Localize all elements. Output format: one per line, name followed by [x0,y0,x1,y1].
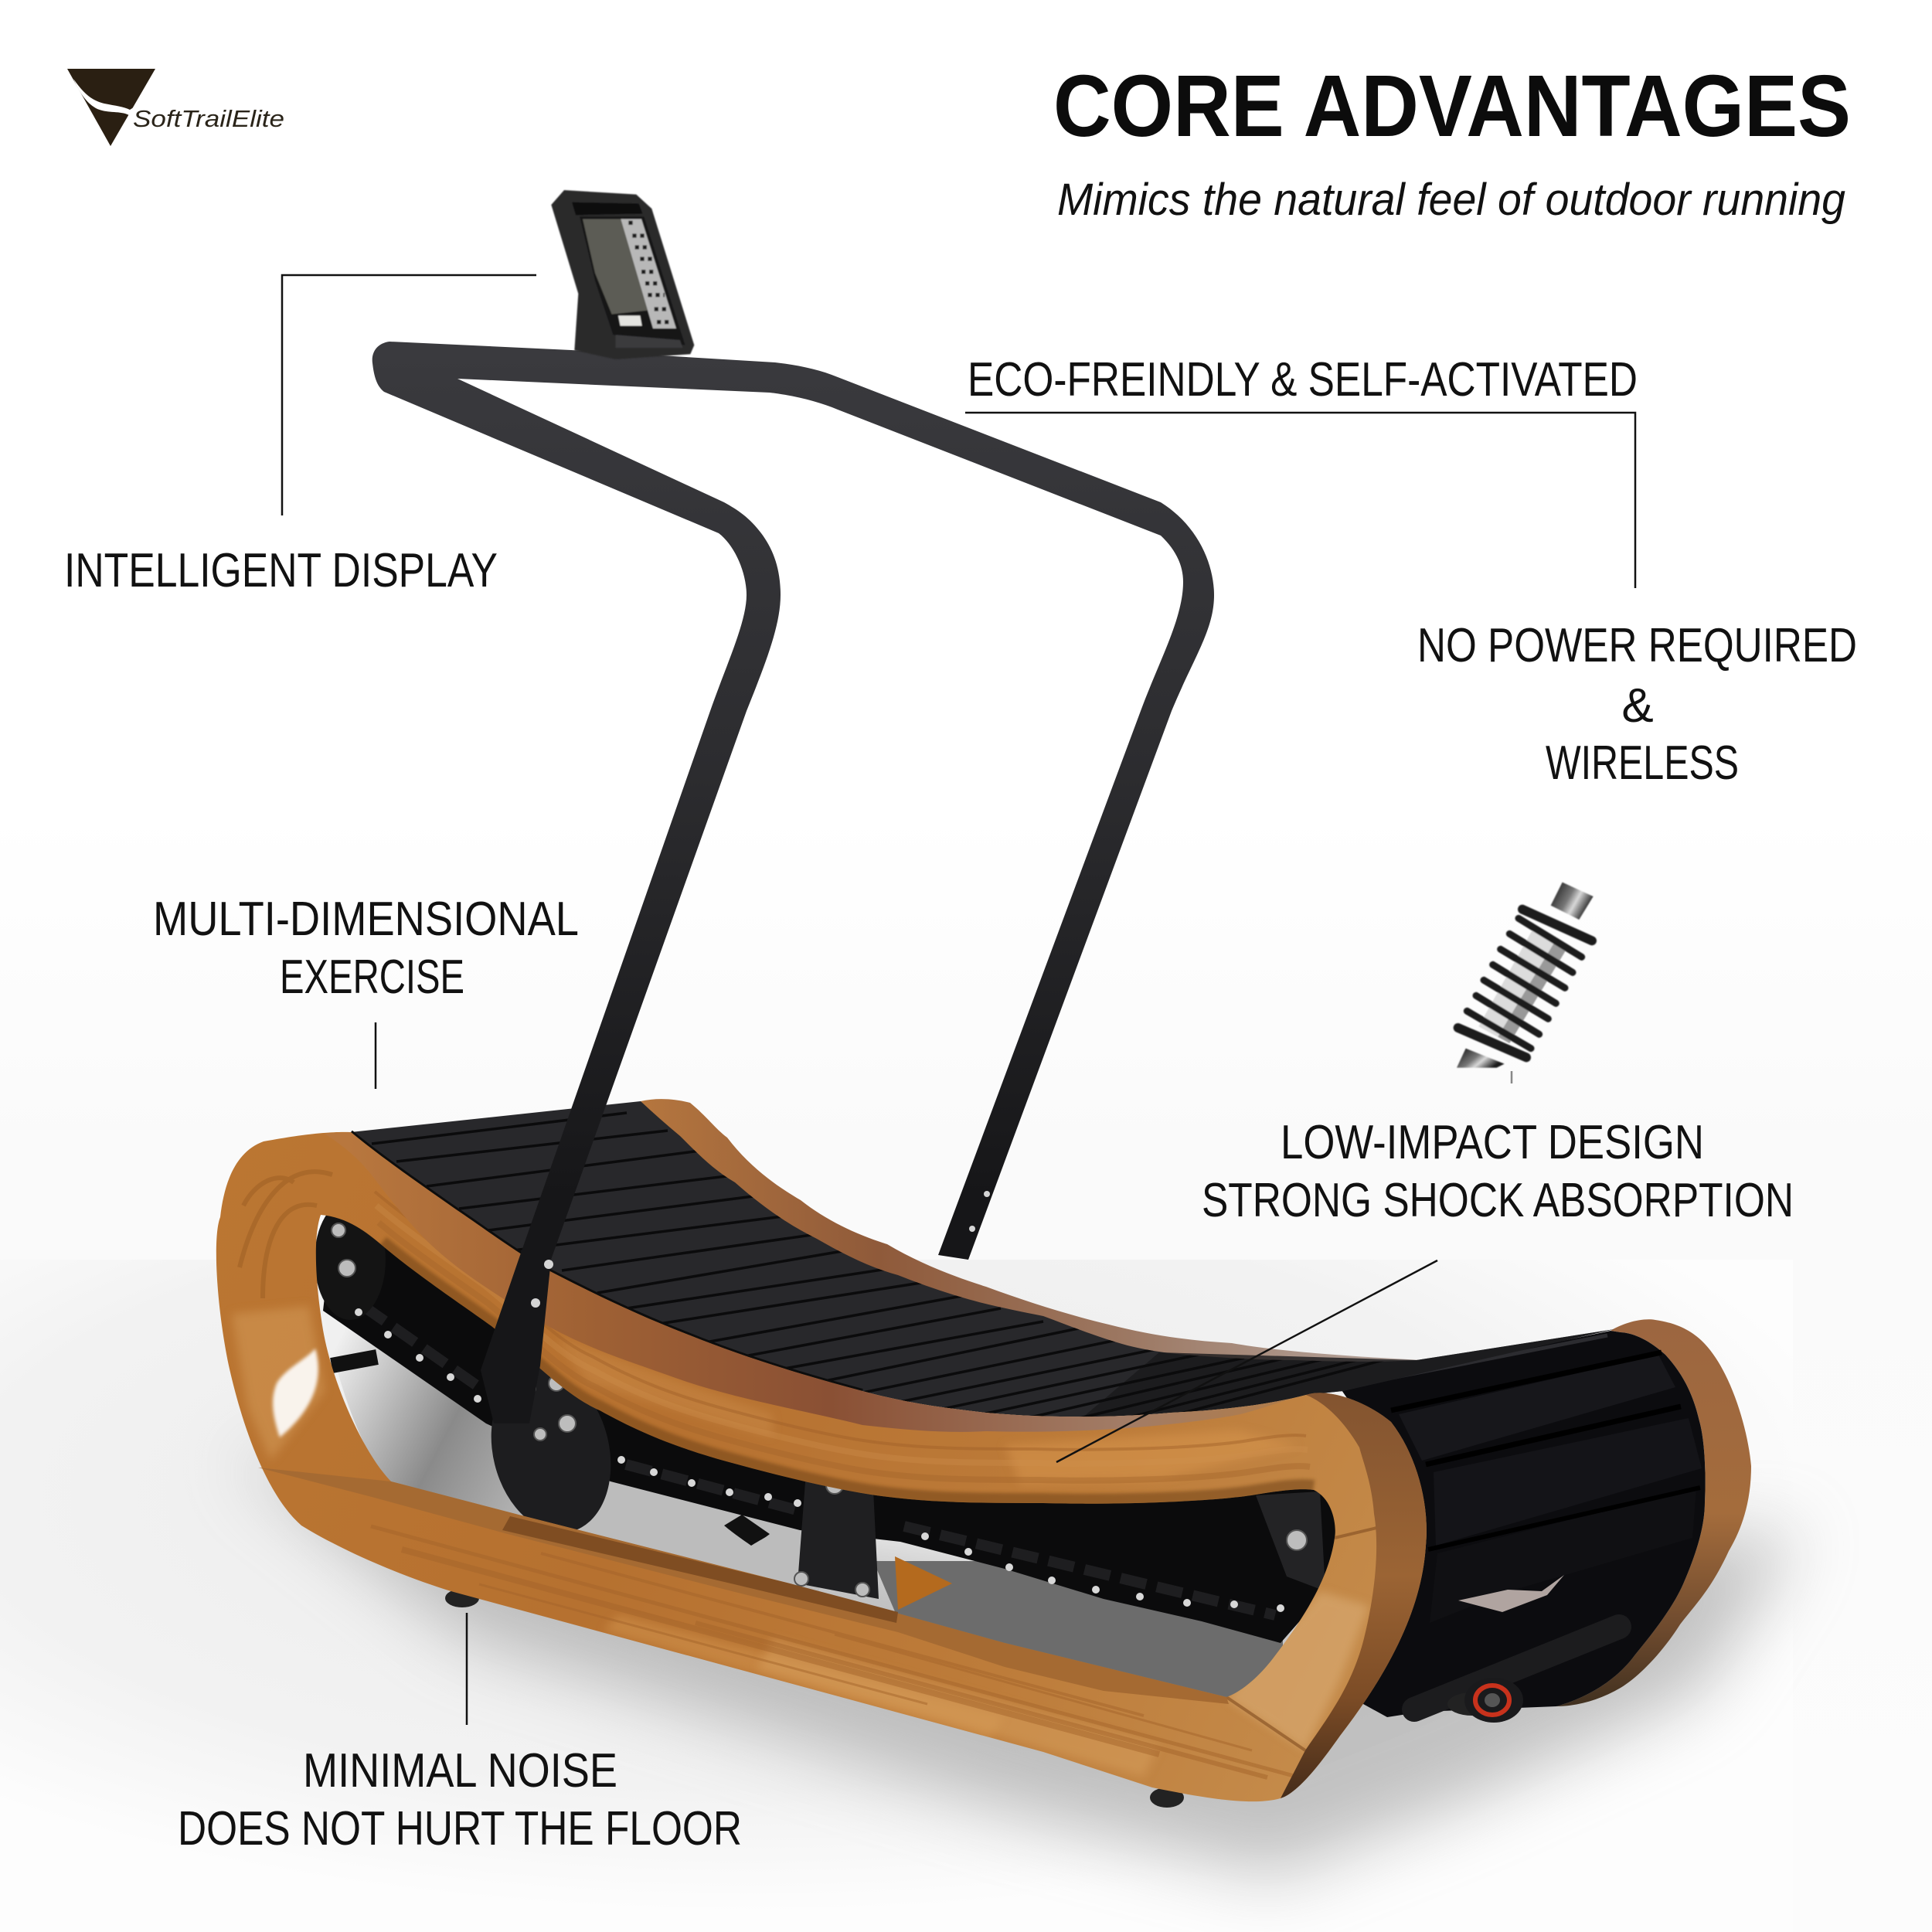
logo wordmark: SoftTrailElite [133,105,284,132]
chain studs [355,1308,1284,1612]
drive disc [474,1355,628,1546]
centre bracket [798,1472,879,1599]
rail under-shadow [383,1242,1314,1500]
running belt [351,1101,1614,1417]
label: intelligent display: INTELLIGENT DISPLAY [64,544,498,597]
label: multi-dimensional exercise: MULTI-DIMENSIONAL [153,893,579,946]
back wood frame [1556,1319,1751,1706]
foot right [1150,1787,1184,1808]
title: CORE ADVANTAGES [1053,57,1851,155]
treadmill [216,342,1751,1808]
logo: SoftTrailElite [67,69,284,146]
label: low-impact design: LOW-IMPACT DESIGN [1281,1116,1704,1169]
label: eco-friendly: ECO-FREINDLY & SELF-ACTIVATED [968,353,1638,406]
front wood frame [216,1132,1427,1801]
left sprocket plate [315,1199,386,1320]
mechanism [315,1199,1345,1643]
belt near edge [351,1132,862,1391]
icon: shock absorber spring [1457,883,1594,1068]
floor shadow [232,1453,1801,1878]
caster wheel [1447,1678,1523,1723]
shock absorber tick [1511,1071,1512,1083]
far wood rail [641,1099,1422,1372]
drum slot highlight [1458,1575,1564,1612]
label: low-impact design [1202,1116,1794,1227]
bottom rail inner strip [258,1468,1229,1704]
top strip [325,1132,1306,1432]
label: no power required [1417,619,1857,790]
foot left [445,1589,479,1607]
base rail [1414,1627,1619,1709]
label: multi-dimensional exercise: EXERCISE [280,951,464,1004]
handlebar frame [372,342,1214,1423]
subtitle: Mimics the natural feel of outdoor running [1057,175,1845,225]
label: multi-dimensional exercise [153,893,579,1004]
label: minimal noise [178,1744,742,1855]
leader: low-impact [1056,1260,1437,1462]
leader: intelligent display [282,275,536,515]
bolts [332,1223,1307,1597]
chain blocks [363,1306,1275,1615]
back drum [1340,1331,1706,1717]
belt slats [372,1113,1406,1420]
gloss highlight [273,1349,318,1437]
label: no power required: WIRELESS [1546,736,1739,790]
belt dark end sheen [1082,1329,1614,1418]
corner mitres [1226,1526,1383,1750]
post bolts [531,1191,990,1308]
label: minimal noise: DOES NOT HURT THE FLOOR [178,1802,742,1855]
label: low-impact design: STRONG SHOCK ABSORPTION [1202,1174,1794,1227]
leader: minimal noise [466,1613,468,1725]
label: minimal noise: MINIMAL NOISE [303,1744,617,1798]
right side band [1281,1393,1427,1798]
label: no power required: & [1621,679,1654,733]
frame opening background [317,1267,1283,1700]
right bracket [1256,1492,1325,1591]
icon: triangle mark [67,69,155,146]
left arc grain [240,1172,332,1298]
wood grain and tonal patches [232,1172,1383,1781]
rail grain [379,1223,1310,1481]
orange block [895,1556,952,1610]
light patches [1009,1431,1281,1478]
leader: eco-friendly [965,413,1635,588]
leader: multi-dimensional [375,1022,376,1089]
icon: display console [551,190,694,359]
bottom rail grain [371,1526,1314,1781]
